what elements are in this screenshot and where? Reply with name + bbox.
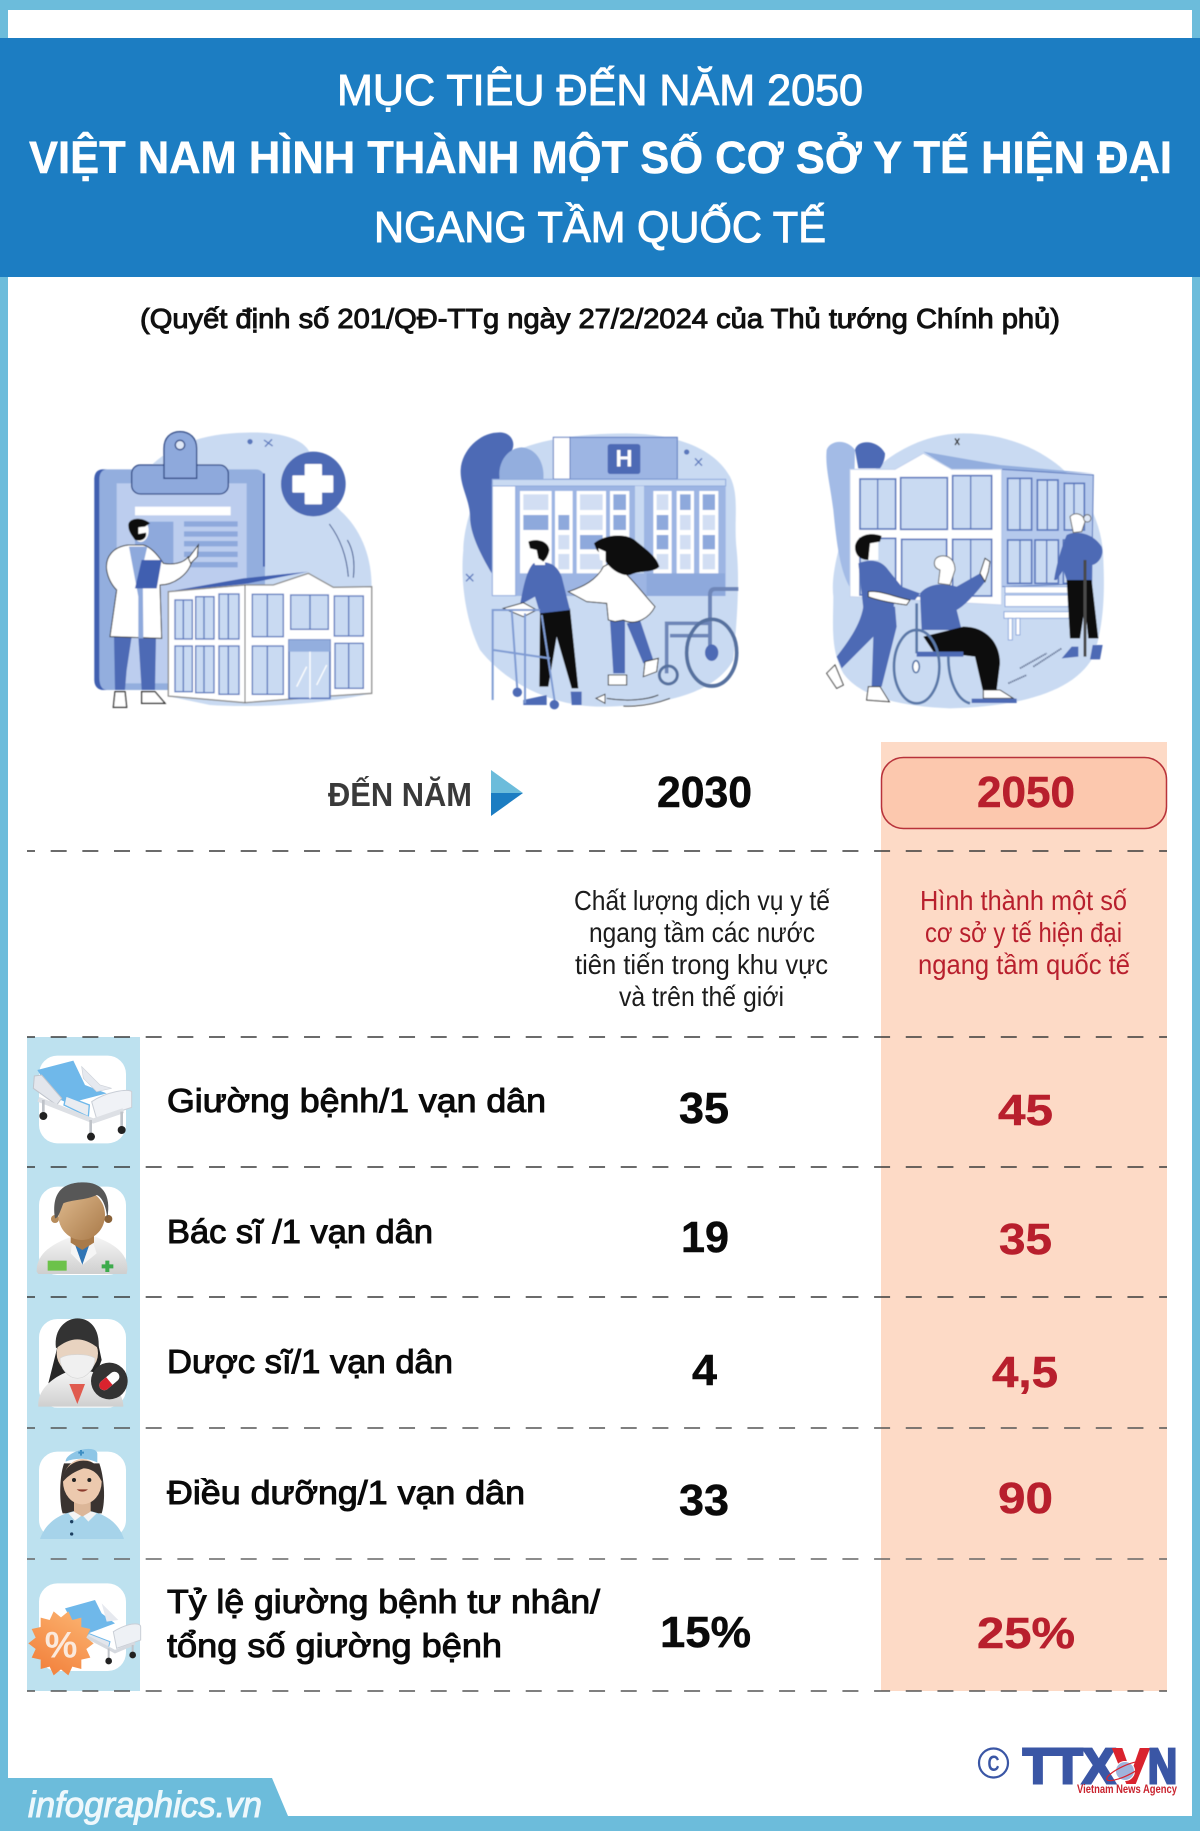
column heading 2050 xyxy=(882,758,1166,828)
illustration: nurse helping patient outside hospital xyxy=(461,432,738,709)
icon: arrow xyxy=(491,770,523,816)
icon: private hospital bed percentage xyxy=(28,1583,141,1675)
percent sign: % xyxy=(45,1624,77,1665)
row label: private bed ratio xyxy=(167,1583,601,1664)
icon: nurse xyxy=(39,1449,126,1539)
year header label: ĐẾN NĂM xyxy=(328,776,472,813)
agency wordmark TTX: TTX xyxy=(1023,1740,1115,1794)
2030 goal description: ngang tầm các nước xyxy=(589,917,815,948)
2050 goal description: Hình thành một số xyxy=(920,885,1127,916)
year 2050: 2050 xyxy=(977,768,1075,817)
column heading 2030: 2030 xyxy=(657,768,752,817)
2030 values xyxy=(660,1084,751,1657)
hospital sign letter: H xyxy=(615,446,633,473)
title banner xyxy=(0,38,1200,277)
footer tab: infographics.vn xyxy=(0,1778,288,1825)
row label: private bed ratio: tổng số giường bệnh xyxy=(167,1627,502,1664)
footer site name: infographics.vn xyxy=(28,1784,262,1825)
logo: copyright mark and TTXVN xyxy=(979,1740,1177,1796)
2030 goal description: và trên thế giới xyxy=(619,981,784,1012)
2050 values: 90 xyxy=(998,1474,1053,1523)
2030 goal description xyxy=(574,885,830,1012)
2050 values: 4,5 xyxy=(992,1348,1058,1397)
2050 goal description: ngang tầm quốc tế xyxy=(918,949,1130,980)
2030 values: 33 xyxy=(679,1476,729,1525)
row label: private bed ratio: Tỷ lệ giường bệnh tư nhân/ xyxy=(167,1583,601,1620)
agency wordmark V: V xyxy=(1113,1740,1149,1794)
row label: pharmacists: Dược sĩ/1 vạn dân xyxy=(167,1343,453,1380)
2030 values: 15% xyxy=(660,1608,751,1657)
icon: pharmacist xyxy=(38,1318,128,1408)
agency wordmark N: N xyxy=(1148,1740,1177,1794)
title line 1: MỤC TIÊU ĐẾN NĂM 2050 xyxy=(337,65,863,115)
2050 goal description: cơ sở y tế hiện đại xyxy=(925,917,1122,948)
row label: doctors: Bác sĩ /1 vạn dân xyxy=(167,1213,433,1250)
agency name: Vietnam News Agency xyxy=(1077,1784,1177,1796)
panel: icon column xyxy=(27,1037,140,1691)
row label: nurses: Điều dưỡng/1 vạn dân xyxy=(167,1474,525,1511)
illustration: doctor with clipboard and hospital xyxy=(94,432,372,707)
title line 2: VIỆT NAM HÌNH THÀNH MỘT SỐ CƠ SỞ Y TẾ HIỆN ĐẠI xyxy=(29,132,1172,183)
2050 values: 35 xyxy=(999,1215,1052,1264)
row label: beds: Giường bệnh/1 vạn dân xyxy=(167,1082,546,1119)
2050 goal description xyxy=(918,885,1130,980)
title line 3: NGANG TẦM QUỐC TẾ xyxy=(374,201,826,252)
2030 goal description: tiên tiến trong khu vực xyxy=(575,949,828,980)
2050 values: 25% xyxy=(977,1609,1075,1658)
icon: hospital bed xyxy=(33,1056,132,1143)
2030 values: 4 xyxy=(692,1346,718,1395)
2030 goal description: Chất lượng dịch vụ y tế xyxy=(574,885,830,916)
copyright letter: C xyxy=(988,1751,1000,1776)
icon: doctor xyxy=(37,1182,127,1275)
2030 values: 19 xyxy=(681,1213,729,1262)
illustration: wheelchair patient with carer xyxy=(826,433,1104,708)
2050 values xyxy=(977,1086,1075,1658)
panel: 2050 highlight column xyxy=(881,742,1167,1691)
2030 values: 35 xyxy=(679,1084,729,1133)
globe emblem xyxy=(1105,1758,1145,1784)
subtitle: decision reference: (Quyết định số 201/QĐ-TTg ngày 27/2/2024 của Thủ tướng Chính phủ) xyxy=(140,303,1060,334)
2050 values: 45 xyxy=(998,1086,1053,1135)
